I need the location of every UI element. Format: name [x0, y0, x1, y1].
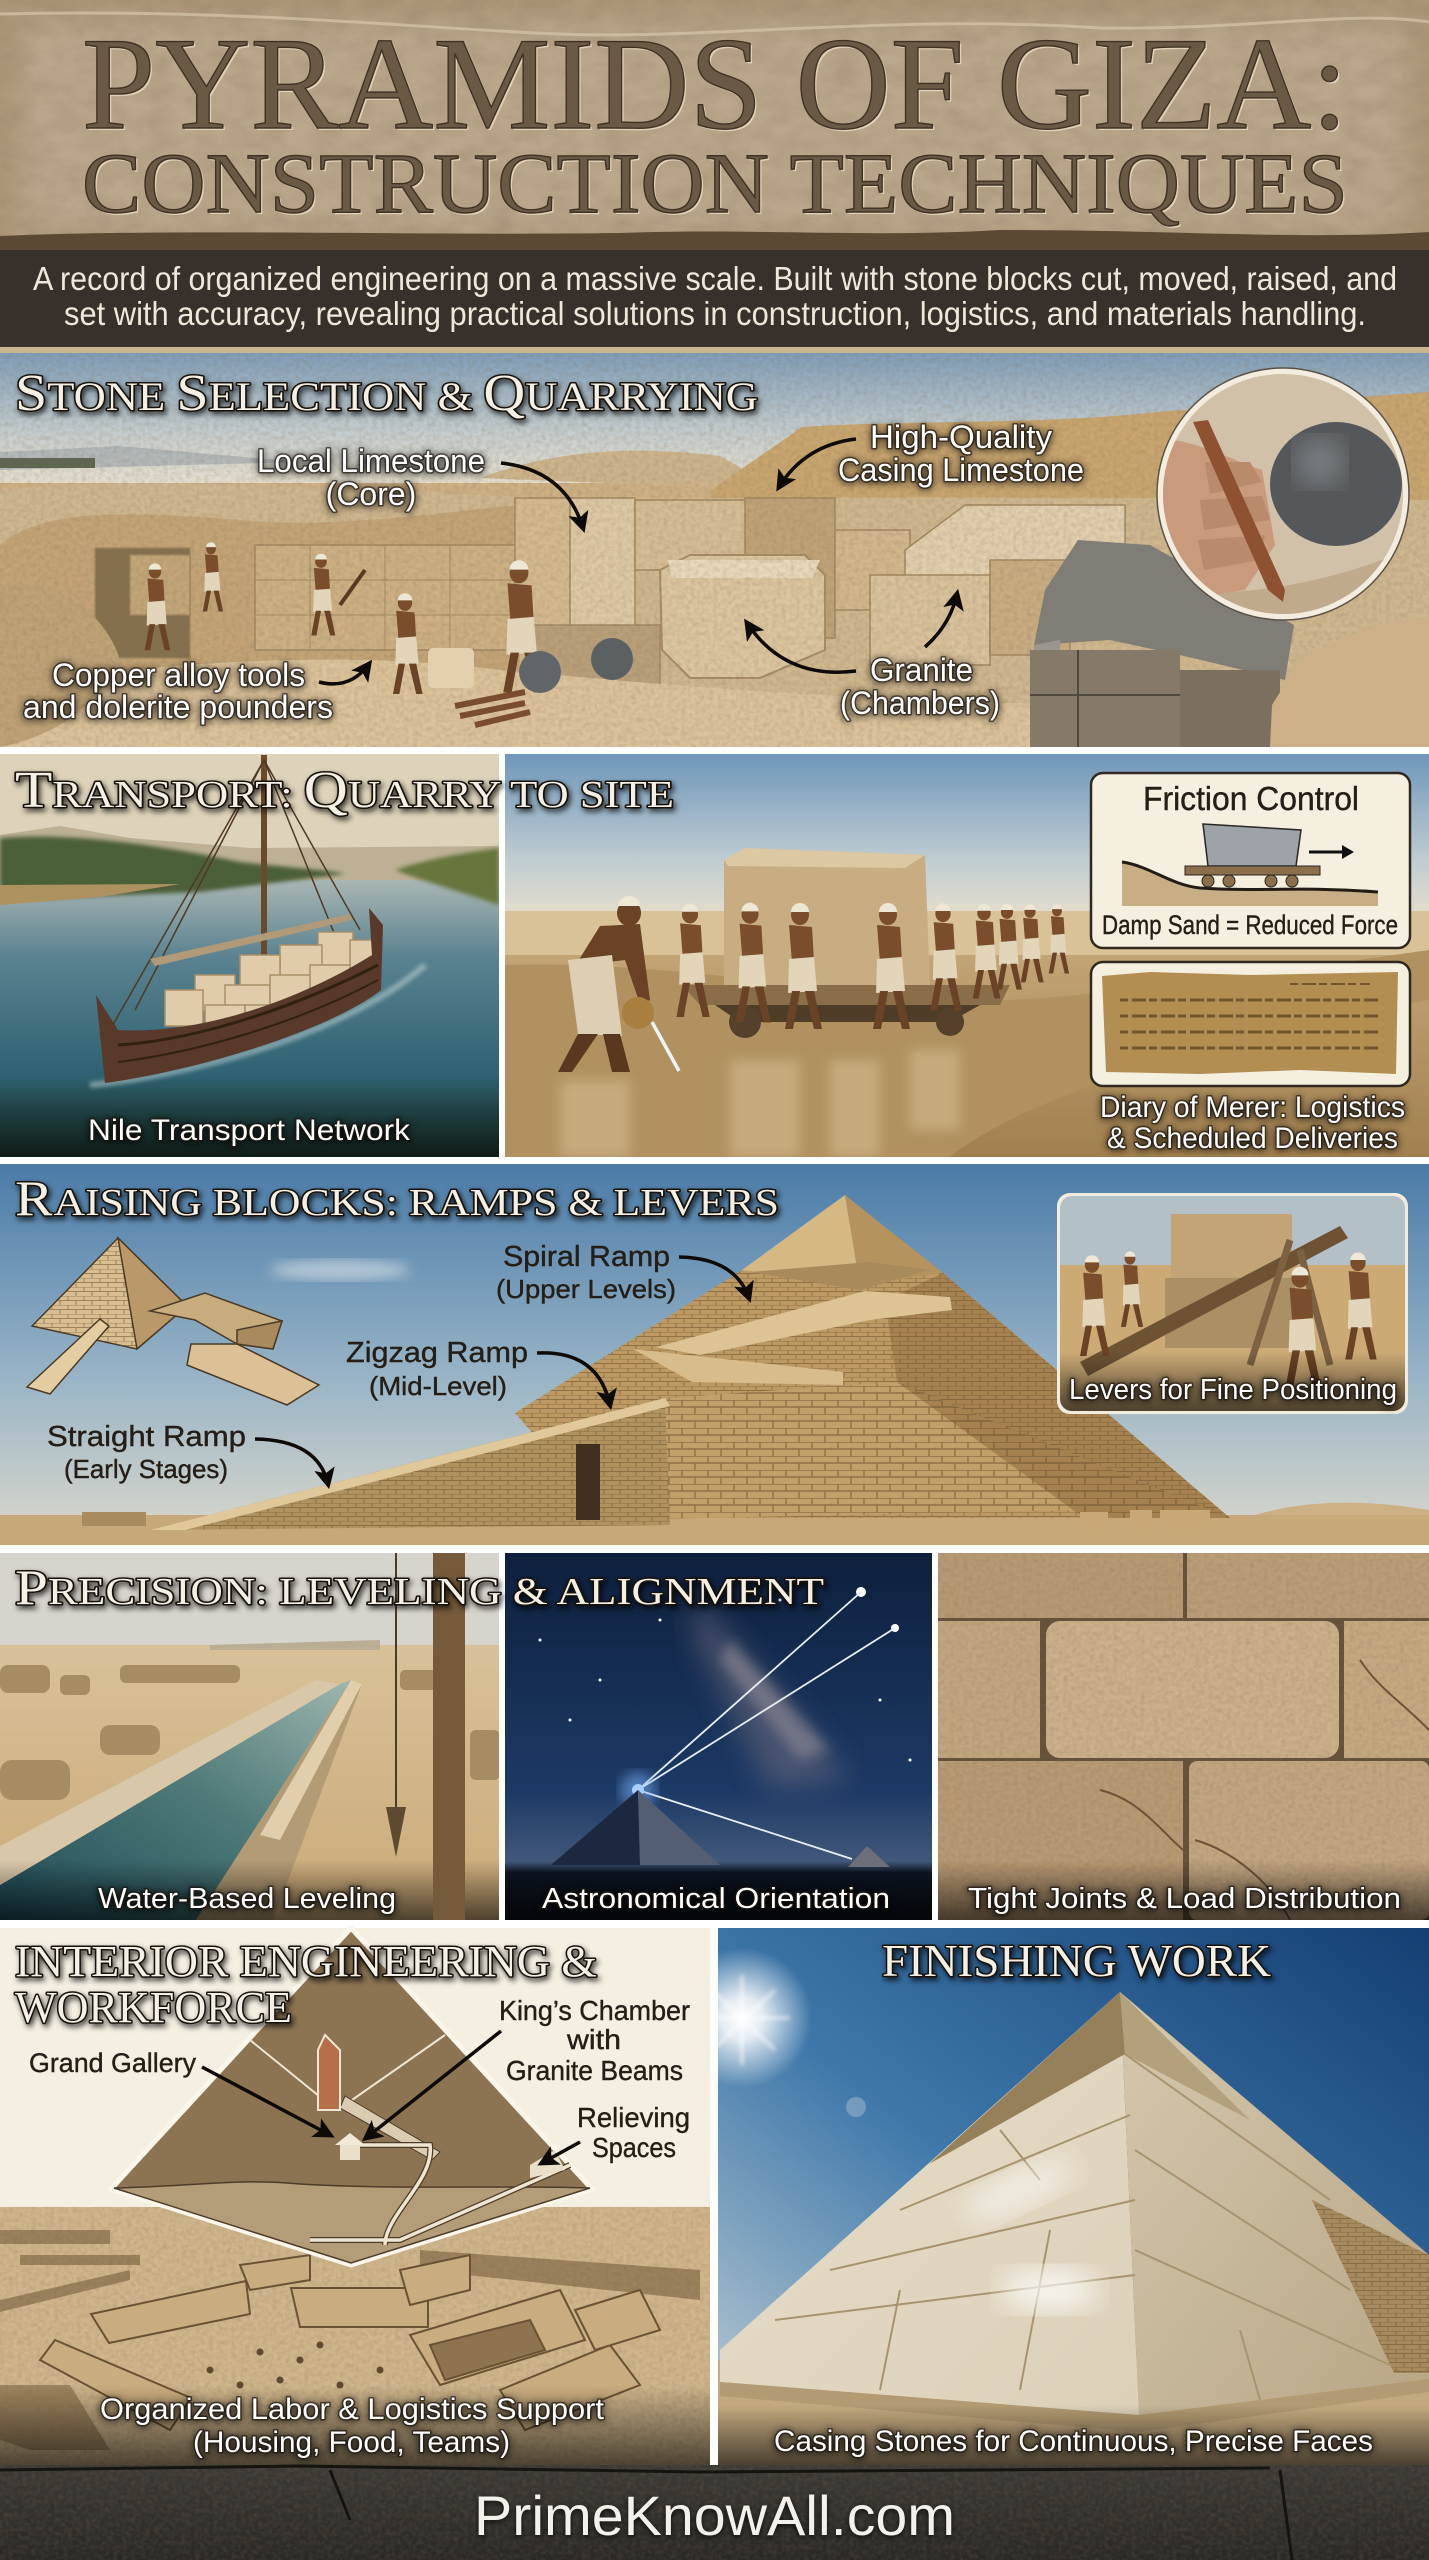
panel: nile transport: [0, 754, 499, 1157]
label: straight ramp: Straight Ramp: [47, 1421, 246, 1453]
label: relieving spaces: Spaces: [592, 2132, 676, 2163]
label: zigzag ramp: Zigzag Ramp: [346, 1337, 528, 1369]
label: king's chamber: [366, 1995, 690, 2138]
masonry blocks: [938, 1553, 1429, 1920]
granite blocks: [1030, 540, 1429, 747]
main pyramid with ramps: [150, 1195, 1230, 1534]
label: spiral ramp: (Upper Levels): [496, 1274, 676, 1304]
panel: stone selection and quarrying: [0, 353, 1429, 747]
caption: water-based leveling: Water-Based Leveling: [98, 1883, 396, 1915]
heading: interior engineering: INTERIOR ENGINEERING &: [15, 1937, 597, 1986]
intro band: set with accuracy, revealing practical solutions in construction, logistics, and materials handling.: [64, 295, 1366, 332]
title: PYRAMIDS OF GIZA:: [82, 10, 1348, 157]
hauling workers: [676, 903, 1069, 1029]
large limestone block: [660, 555, 825, 678]
label: granite chambers: Granite: [870, 652, 973, 688]
title: PYRAMIDS OF GIZA:: [84, 12, 1350, 159]
panel: raising blocks: [0, 1164, 1429, 1545]
label: casing limestone: Casing Limestone: [838, 452, 1084, 488]
label: spiral ramp: [496, 1241, 749, 1304]
panel: sledge hauling over wet sand: [505, 754, 1429, 1157]
sun glare: [672, 1948, 866, 2117]
label: relieving spaces: [542, 2102, 690, 2163]
caption: casing stones: Casing Stones for Continuous, Precise Faces: [774, 2425, 1373, 2458]
label: relieving spaces: Relieving: [577, 2102, 690, 2133]
inset: levers for fine positioning: Levers for Fine Positioning: [1069, 1374, 1397, 1406]
pyramid cross-section: [111, 1928, 592, 2265]
icon: ramp types diagram: [27, 1238, 319, 1405]
cargo boat: [90, 755, 425, 1085]
label: casing limestone: [779, 419, 1084, 488]
water trough: [0, 1680, 362, 1920]
worker pouring water: [558, 896, 679, 1072]
label: local limestone: [257, 443, 583, 528]
sight lines: [638, 1592, 895, 1859]
label: casing limestone: High-Quality: [870, 419, 1052, 455]
label: local limestone: Local Limestone: [257, 443, 485, 479]
caption: organized labor: (Housing, Food, Teams): [193, 2426, 510, 2459]
inset: copper tool and dolerite ball: [1156, 367, 1410, 621]
label: local limestone: (Core): [326, 476, 416, 512]
cased pyramid: [720, 1992, 1429, 2432]
panel: finishing work: [672, 1928, 1429, 2465]
footer stone band: [0, 2465, 1429, 2560]
heading: interior engineering: [15, 1937, 597, 2032]
heading: finishing work: FINISHING WORK: [882, 1935, 1271, 1986]
label: straight ramp: [47, 1421, 328, 1484]
footer url: PrimeKnowAll.com: [474, 2484, 955, 2547]
label: granite chambers: (Chambers): [840, 685, 1000, 721]
label: king's chamber: King’s Chamber: [499, 1995, 690, 2026]
panel: water-based leveling: [0, 1553, 500, 1920]
label: spiral ramp: Spiral Ramp: [503, 1241, 670, 1273]
workers' town photo: [0, 2207, 710, 2465]
label: copper tools: and dolerite pounders: [23, 689, 333, 725]
caption: diary of merer: & Scheduled Deliveries: [1107, 1122, 1398, 1155]
label: zigzag ramp: (Mid-Level): [369, 1371, 507, 1401]
panel: interior engineering and workforce: [0, 1928, 710, 2465]
caption: organized labor: Organized Labor & Logistics Support: [100, 2393, 605, 2426]
callout: friction control diagram: Friction Control: [1143, 780, 1359, 817]
quarry workers: [145, 542, 542, 694]
label: copper tools: Copper alloy tools: [52, 657, 305, 693]
night pyramids: [551, 1790, 890, 1867]
title: [82, 10, 1350, 233]
panel: astronomical orientation: [505, 1553, 932, 1920]
caption: astronomical orientation: Astronomical Orientation: [542, 1883, 890, 1915]
panel: tight joints: [938, 1553, 1429, 1920]
header stone plaque: [0, 0, 1429, 252]
title: CONSTRUCTION TECHNIQUES: [82, 135, 1348, 231]
label: king's chamber: Granite Beams: [506, 2055, 683, 2086]
plumb post and bob: [386, 1553, 465, 1920]
heading: raising blocks: RAISING BLOCKS: RAMPS & LEVERS: [15, 1170, 779, 1226]
dolerite pounders and stone: [428, 638, 633, 725]
heading: interior engineering: WORKFORCE: [15, 1983, 292, 2032]
callout: friction control diagram: [1091, 773, 1410, 948]
heading: transport: TRANSPORT: QUARRY TO SITE: [15, 762, 674, 819]
caption: nile transport network: Nile Transport Network: [88, 1114, 411, 1147]
label: copper tools: [23, 657, 369, 725]
caption: diary of merer: [1100, 1091, 1405, 1155]
quarry wall blocks: [95, 498, 1125, 695]
heading: stone selection: STONE SELECTION & QUARRYING: [15, 365, 758, 422]
label: grand gallery: Grand Gallery: [29, 2048, 196, 2078]
title: CONSTRUCTION TECHNIQUES: [84, 137, 1350, 233]
caption: tight joints: Tight Joints & Load Distribution: [968, 1883, 1401, 1915]
callout: diary of merer papyrus: [1091, 962, 1410, 1086]
stone block on sledge: [682, 848, 1010, 1038]
caption: organized labor: [100, 2393, 605, 2459]
label: granite chambers: [747, 594, 1000, 721]
caption: diary of merer: Diary of Merer: Logistics: [1100, 1091, 1405, 1124]
intro band: [0, 250, 1429, 353]
label: straight ramp: (Early Stages): [64, 1454, 228, 1484]
label: grand gallery: [29, 2048, 330, 2135]
label: zigzag ramp: [346, 1337, 610, 1405]
inset: levers for fine positioning: [1057, 1193, 1408, 1414]
stars: [538, 1587, 912, 1762]
label: king's chamber: with: [566, 2024, 621, 2055]
heading: precision: PRECISION: LEVELING & ALIGNMENT: [15, 1559, 824, 1615]
